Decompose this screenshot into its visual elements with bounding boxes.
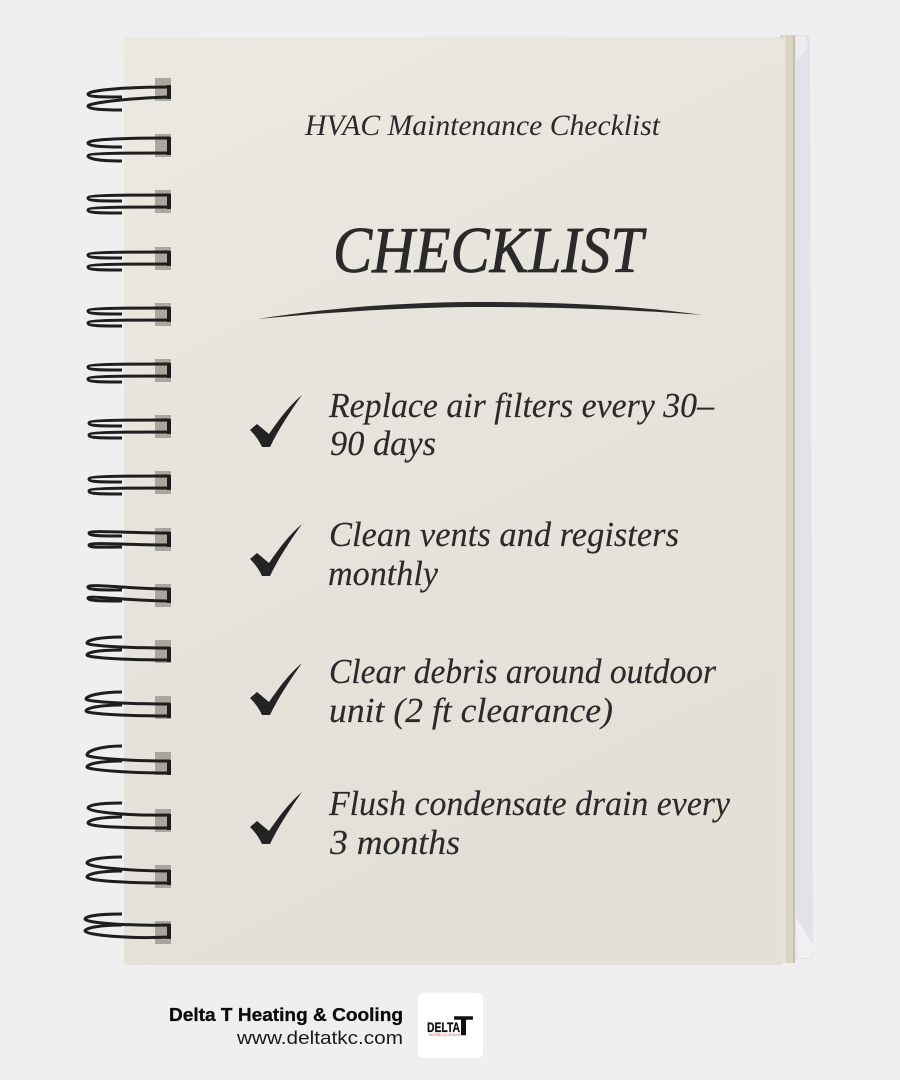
checklist item 4: [250, 784, 730, 862]
checklist item 3: [250, 652, 716, 730]
checklist item 3: unit (2 ft clearance): [329, 691, 613, 730]
checklist item 1: Replace air filters every 30–: [328, 386, 714, 425]
checklist item 2: Clean vents and registers: [329, 515, 679, 554]
notebook page: [124, 37, 783, 965]
footer company name: Delta T Heating & Cooling: [169, 1005, 403, 1025]
page edges: [780, 35, 795, 963]
logo: [418, 993, 483, 1058]
checklist item 4: Flush condensate drain every: [328, 784, 730, 823]
checklist item 2: [250, 515, 679, 593]
back cover: [790, 35, 813, 959]
checklist item 1: [250, 386, 714, 463]
checklist item 1: 90 days: [330, 424, 436, 463]
logo: DELTA: [427, 1020, 460, 1035]
heading: CHECKLIST: [333, 214, 647, 287]
footer website: www.deltatkc.com: [236, 1028, 403, 1048]
subtitle: HVAC Maintenance Checklist: [304, 109, 661, 142]
checklist item 3: Clear debris around outdoor: [329, 652, 716, 691]
checklist item 2: monthly: [328, 554, 438, 593]
logo: T: [454, 1011, 474, 1041]
underline swoosh: [258, 302, 702, 319]
spiral binding: [85, 78, 171, 944]
logo: HEATING & COOLING: [429, 1033, 461, 1037]
checklist item 4: 3 months: [329, 823, 460, 862]
